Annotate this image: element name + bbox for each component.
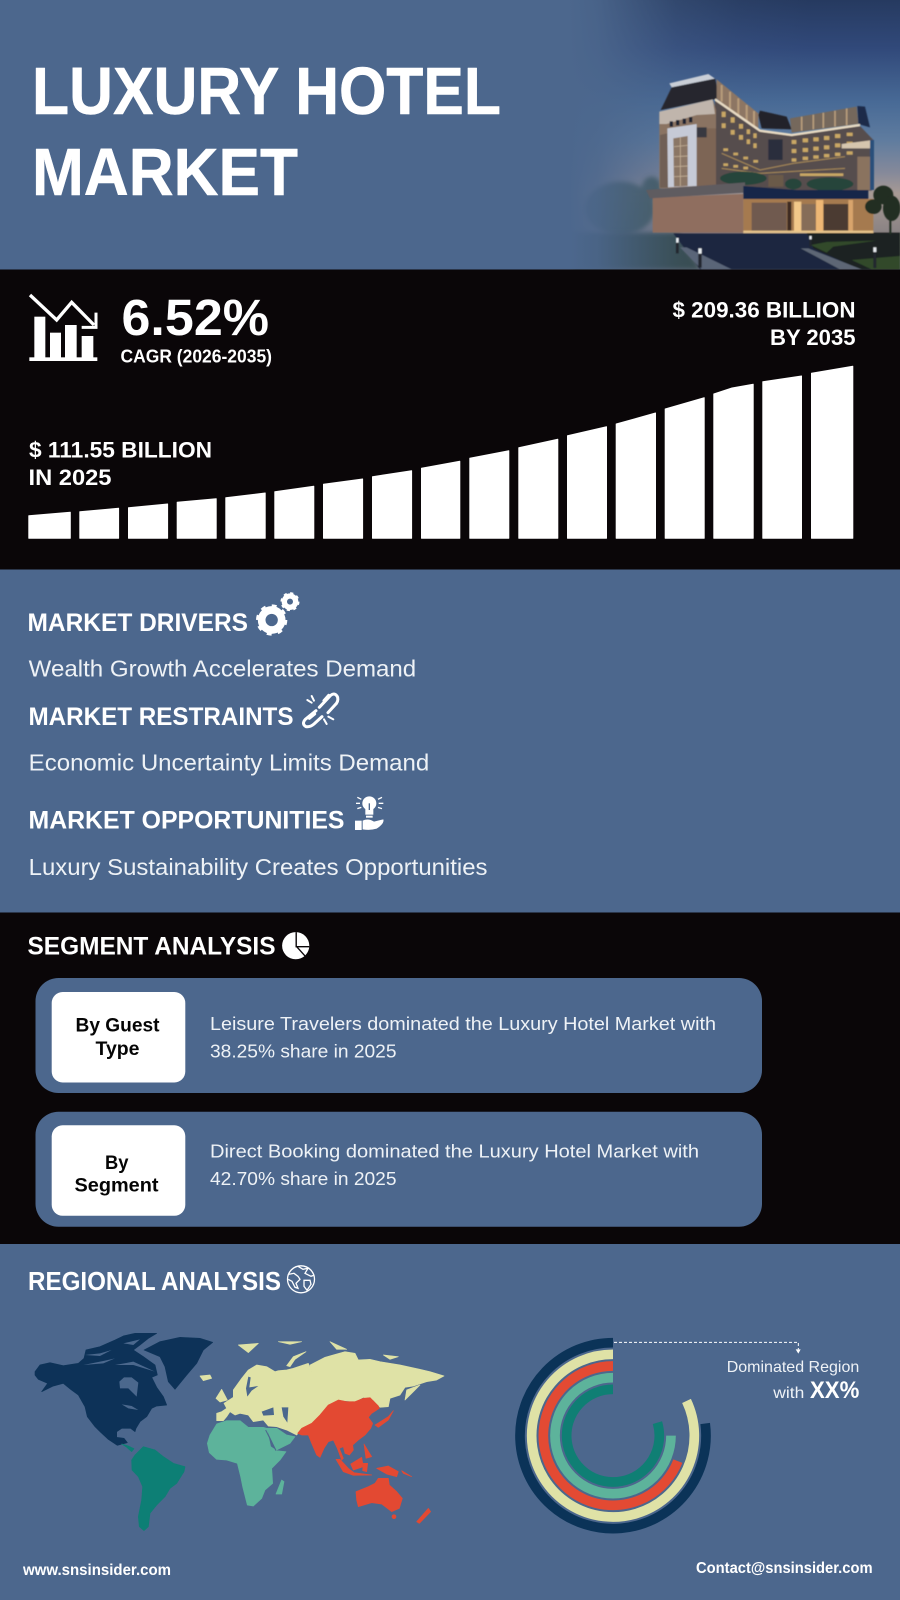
podium wall (653, 194, 743, 233)
arrow: dotted leader to callout (614, 1342, 801, 1354)
label box (52, 992, 185, 1082)
2025 value callout: $ 111.55 BILLION (29, 437, 212, 462)
tower white centre (667, 124, 697, 187)
podium roof (646, 182, 745, 198)
left lawn (573, 233, 700, 269)
map: North America and Greenland (35, 1333, 213, 1445)
heading: market drivers: MARKET DRIVERS (28, 609, 248, 637)
garden lamps (676, 236, 876, 268)
panel: market dynamics (0, 570, 900, 912)
trees behind podium (585, 177, 662, 235)
upper floor of left wing (717, 79, 758, 133)
tower roof (661, 74, 720, 110)
corner roof (857, 106, 870, 127)
bar chart: market growth (29, 366, 853, 538)
upper floor of right wing (790, 107, 858, 133)
map: Arctic channels and Hudson Bay (83, 1339, 155, 1410)
callout: dominated region: XX% (810, 1377, 859, 1404)
2035 value callout: $ 209.36 BILLION (672, 297, 856, 322)
icon: globe (288, 1266, 314, 1293)
map: inland seas (246, 1377, 288, 1423)
label text: Type (96, 1038, 140, 1060)
2035 value callout: BY 2035 (770, 325, 856, 350)
tower body (659, 101, 716, 188)
title (32, 54, 501, 210)
label text (76, 1015, 160, 1060)
photo: luxury hotel at dusk (540, 0, 900, 269)
facade upper windows (722, 112, 853, 176)
map: Asia Pacific (298, 1398, 431, 1523)
fade into header (540, 0, 900, 269)
right tower pier (857, 157, 871, 190)
text: market opportunity: Luxury Sustainability Creates Opportunities (29, 854, 487, 880)
CAGR value: 6.52% (122, 289, 269, 346)
heading: market opportunities: MARKET OPPORTUNITIES (28, 806, 344, 834)
description (210, 1140, 699, 1189)
card: by guest type (36, 978, 762, 1093)
world map (35, 1333, 444, 1531)
panel: regional analysis (0, 1244, 900, 1600)
heading: market restraints: MARKET RESTRAINTS (28, 703, 294, 731)
text: market driver: Wealth Growth Accelerates Demand (29, 656, 416, 682)
callout: dominated region (727, 1359, 859, 1404)
2025 value callout (28, 437, 212, 490)
panel: header background (0, 0, 900, 270)
label text (74, 1152, 159, 1197)
card: by segment (36, 1112, 762, 1227)
label text: Segment (74, 1175, 159, 1197)
foreground tree (865, 186, 900, 234)
sky (540, 0, 900, 269)
footer: website: www.snsinsider.com (22, 1562, 171, 1579)
courtyard trees (720, 172, 853, 191)
facade lit cornice (715, 99, 860, 135)
main facade (715, 99, 873, 191)
centre glass (768, 139, 783, 160)
panel: segment analysis (0, 912, 900, 1244)
label text: By (105, 1152, 129, 1174)
panel: market size band (0, 270, 900, 570)
map: Africa and Middle East (207, 1421, 295, 1506)
icon: declining chart (29, 295, 97, 361)
centre roof (758, 111, 792, 129)
2025 value callout: IN 2025 (28, 465, 112, 490)
description: 42.70% share in 2025 (210, 1168, 396, 1189)
description: Direct Booking dominated the Luxury Hotel Market with (210, 1140, 699, 1161)
description: Leisure Travelers dominated the Luxury Hotel Market with (210, 1013, 716, 1034)
text: market restraint: Economic Uncertainty Limits Demand (29, 750, 429, 776)
description (210, 1013, 716, 1062)
map: Europe and Northern Asia (200, 1342, 444, 1435)
CAGR label: CAGR (2026-2035) (120, 347, 272, 367)
icon: pie chart (282, 932, 309, 959)
facade lower lit bands (722, 153, 845, 173)
heading: regional analysis: REGIONAL ANALYSIS (28, 1268, 281, 1296)
chart: concentric radial bars (520, 1343, 706, 1529)
icon: light bulb in hand (355, 796, 384, 830)
2035 value callout (672, 297, 856, 350)
callout: dominated region: with (772, 1385, 804, 1402)
title: LUXURY HOTEL (32, 54, 501, 129)
description: 38.25% share in 2025 (210, 1041, 396, 1062)
label box (52, 1125, 185, 1216)
callout: dominated region: Dominated Region (727, 1359, 859, 1376)
label text: By Guest (76, 1015, 160, 1037)
heading: segment analysis: SEGMENT ANALYSIS (28, 932, 276, 960)
driveway and gardens (673, 233, 900, 269)
footer: contact email: Contact@snsinsider.com (696, 1560, 873, 1577)
map: South America (122, 1444, 185, 1531)
title: MARKET (32, 135, 298, 210)
entrance (743, 199, 873, 233)
icon: broken chain (303, 694, 338, 727)
icon: gears (258, 594, 298, 634)
